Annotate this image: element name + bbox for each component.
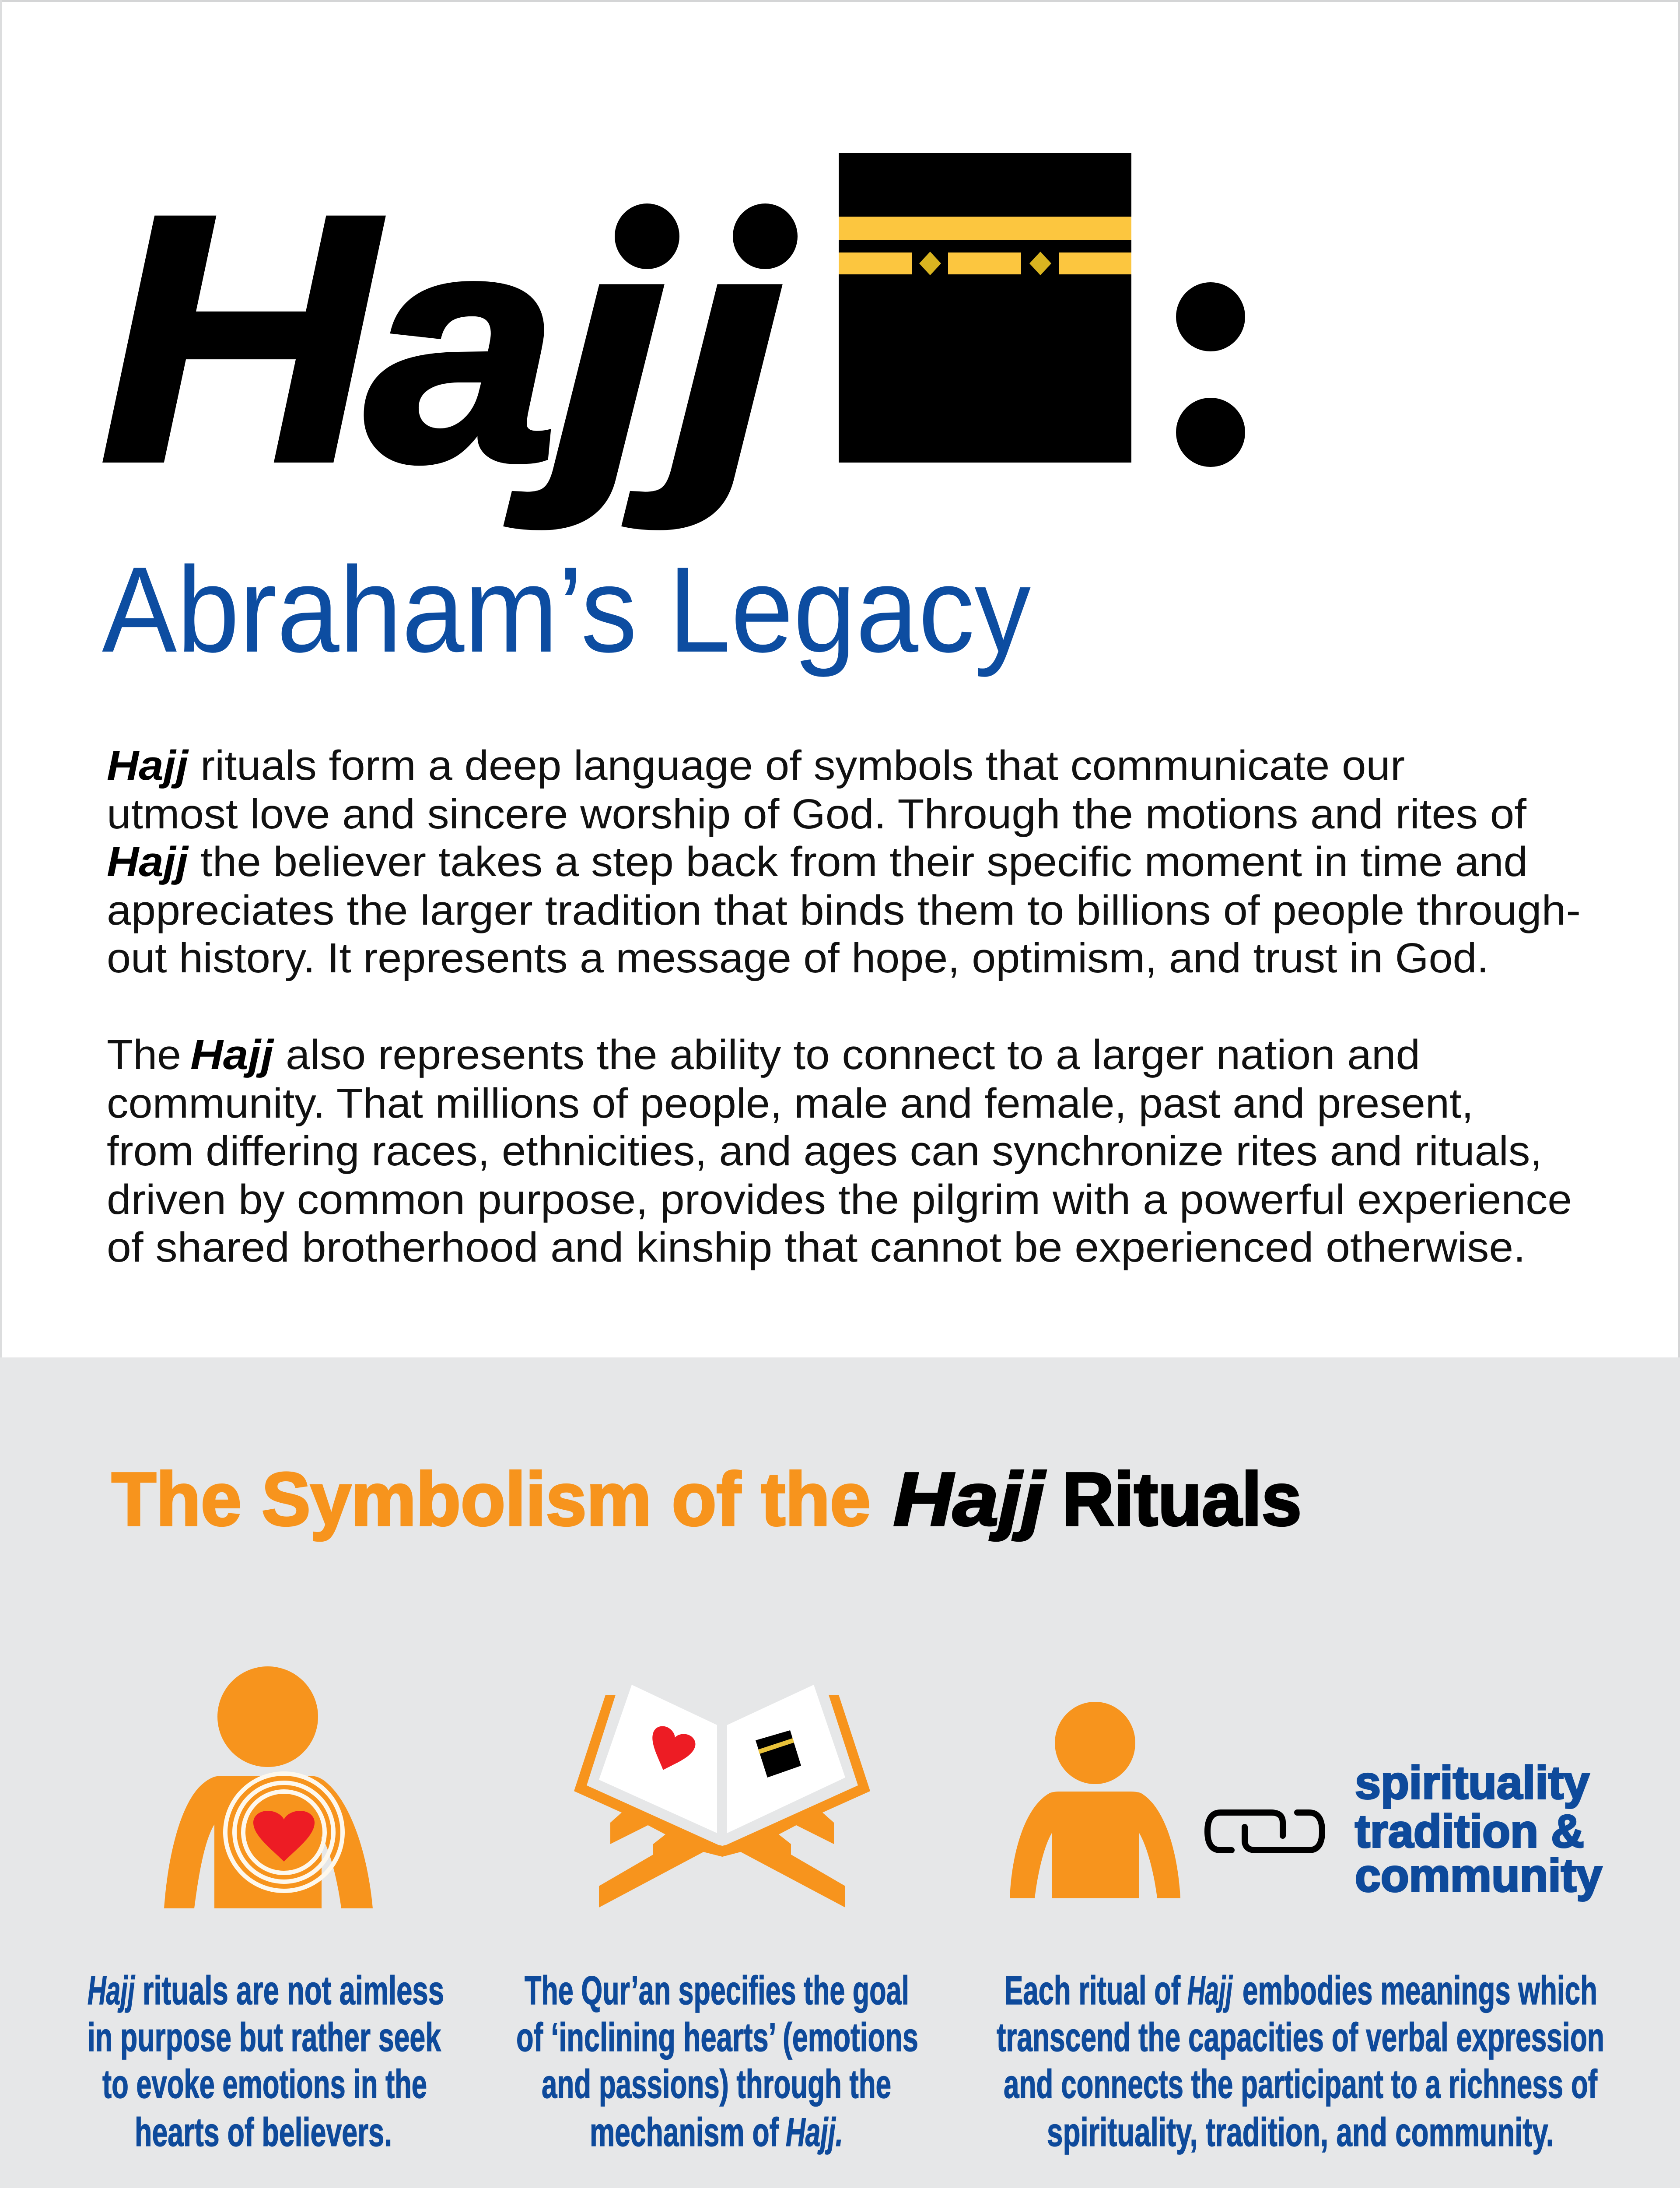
title word: Hajj: j <box>507 165 676 531</box>
caption: inclining hearts <box>516 1968 918 2155</box>
text block: intro paragraph 1: utmost love and sincere worship of God. Through the motions and rites of <box>107 791 1526 838</box>
text block: intro paragraph 1: the believer takes a step back from their specific moment in time and <box>200 838 1528 885</box>
text block: intro paragraph 1: appreciates the larger tradition that binds them to billions of people through- <box>107 887 1581 934</box>
caption: rituals evoke emotions: to evoke emotions in the <box>102 2062 427 2107</box>
title word: Hajj: a <box>365 165 557 529</box>
caption: inclining hearts: and passions) through the <box>542 2062 891 2107</box>
icon: person with radiating heart <box>164 1666 373 1908</box>
text block: intro paragraph 2: of shared brotherhood and kinship that cannot be experienced otherwise. <box>107 1224 1526 1271</box>
text block: intro paragraph 1: Hajj <box>107 838 189 885</box>
text block: intro paragraph 1: Hajj <box>107 742 189 789</box>
colon <box>1176 282 1245 467</box>
text block: intro paragraph 2 <box>107 1031 1572 1271</box>
text block: intro paragraph 1 <box>107 742 1581 982</box>
caption: rituals evoke emotions: hearts of believers. <box>135 2110 392 2155</box>
title word: Hajj: H <box>100 143 386 534</box>
label: spirituality tradition community <box>1355 1757 1602 1901</box>
icon: chain link <box>1208 1813 1322 1850</box>
caption: rituals evoke emotions: Hajj <box>88 1968 136 2013</box>
caption: inclining hearts: Hajj. <box>786 2110 843 2155</box>
caption: rituals evoke emotions: in purpose but rather seek <box>88 2015 441 2060</box>
text block: intro paragraph 2: community. That millions of people, male and female, past and present, <box>107 1080 1474 1127</box>
heading: The Symbolism of the Hajj Rituals: Rituals <box>1062 1457 1302 1541</box>
heading: The Symbolism of the Hajj Rituals: The Symbolism of the <box>112 1457 871 1541</box>
title: Hajj with Kaaba and colon <box>100 143 1245 534</box>
text block: intro paragraph 2: also represents the ability to connect to a larger nation and <box>286 1031 1420 1078</box>
text block: intro paragraph 2: Hajj <box>190 1031 275 1078</box>
caption: rituals evoke emotions: rituals are not aimless <box>143 1968 444 2013</box>
label: spirituality tradition community: spirituality <box>1355 1757 1589 1809</box>
title word: Hajj: j <box>625 165 794 531</box>
heading: The Symbolism of the Hajj Rituals: Hajj <box>893 1457 1046 1541</box>
caption: inclining hearts: mechanism of <box>590 2110 779 2155</box>
caption: meanings beyond words: Hajj <box>1187 1968 1233 2013</box>
caption: meanings beyond words <box>997 1968 1604 2155</box>
caption: inclining hearts: The Qur’an specifies the goal <box>525 1968 909 2013</box>
text block: intro paragraph 2: driven by common purpose, provides the pilgrim with a powerful experience <box>107 1176 1572 1223</box>
icon: person <box>1010 1702 1180 1898</box>
caption: inclining hearts: of ‘inclining hearts’ (emotions <box>516 2015 918 2060</box>
text block: intro paragraph 2: from differing races, ethnicities, and ages can synchronize rites and rituals, <box>107 1128 1542 1175</box>
icon: Kaaba <box>839 153 1131 463</box>
title word: Hajj <box>100 143 814 534</box>
text block: intro paragraph 1: out history. It represents a message of hope, optimism, and trust in God. <box>107 935 1489 982</box>
panel: symbolism of the Hajj rituals <box>0 1357 1680 2188</box>
icon: open Qur'an on stand <box>574 1685 870 1907</box>
text block: intro paragraph 1: rituals form a deep language of symbols that communicate our <box>200 742 1405 789</box>
subtitle: Abraham's Legacy: Abraham’s Legacy <box>102 541 1031 678</box>
heading: The Symbolism of the Hajj Rituals <box>112 1457 1302 1541</box>
caption: rituals evoke emotions <box>88 1968 444 2155</box>
text block: intro paragraph 2: The <box>107 1031 181 1078</box>
caption: meanings beyond words: Each ritual of <box>1004 1968 1180 2013</box>
label: spirituality tradition community: community <box>1355 1850 1602 1901</box>
label: spirituality tradition community: tradition & <box>1355 1806 1584 1857</box>
